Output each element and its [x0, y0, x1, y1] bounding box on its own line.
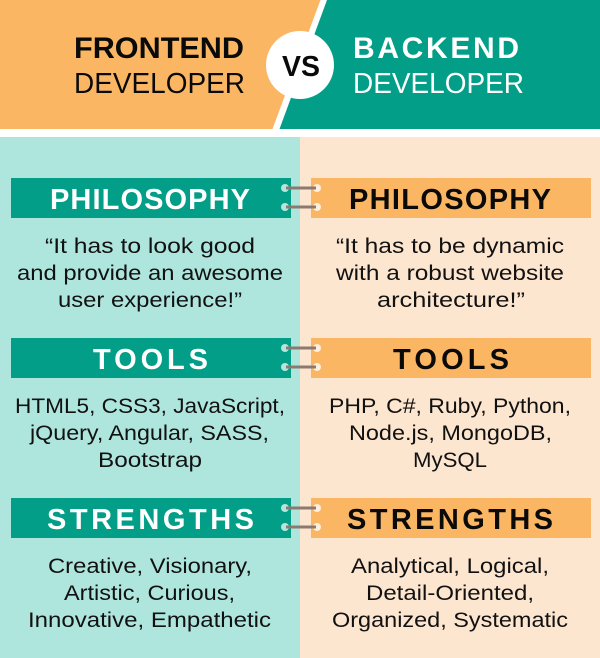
vs badge: VS — [282, 51, 320, 83]
banner: backend philosophy — [311, 178, 591, 218]
panel: frontend column — [0, 137, 300, 658]
banner: frontend tools — [11, 338, 291, 378]
banner: backend strengths: STRENGTHS — [347, 504, 553, 536]
text: frontend philosophy quote: user experience!” — [58, 289, 242, 312]
icon: binder rings strengths — [281, 504, 321, 531]
section: philosophy — [11, 178, 591, 312]
text: backend strengths list: Analytical, Logical, — [351, 555, 549, 578]
banner: backend tools — [311, 338, 591, 378]
text: frontend strengths list: Innovative, Empathetic — [28, 609, 271, 632]
text: frontend tools list — [15, 395, 285, 472]
text: frontend strengths list — [28, 555, 271, 632]
banner: backend strengths — [311, 498, 591, 538]
section: tools — [11, 338, 591, 472]
vs badge — [266, 31, 334, 99]
text: backend tools list — [329, 395, 571, 472]
banner: backend philosophy: PHILOSOPHY — [349, 184, 551, 216]
heading: backend developer — [353, 32, 524, 100]
banner: frontend strengths — [11, 498, 291, 538]
icon: binder rings tools — [281, 344, 321, 371]
heading: frontend developer: DEVELOPER — [74, 68, 245, 100]
heading: frontend developer — [74, 32, 245, 100]
banner: frontend strengths: STRENGTHS — [47, 504, 254, 536]
text: backend tools list: PHP, C#, Ruby, Python, — [329, 395, 571, 418]
heading: backend developer: DEVELOPER — [353, 68, 524, 100]
text: frontend tools list: jQuery, Angular, SASS, — [29, 422, 269, 445]
text: backend tools list: MySQL — [413, 449, 487, 472]
header: backend side — [280, 0, 600, 129]
text: backend philosophy quote: “It has to be dynamic — [336, 235, 564, 258]
text: backend strengths list — [332, 555, 568, 632]
text: backend philosophy quote — [335, 235, 564, 312]
text: frontend philosophy quote — [17, 235, 283, 312]
text: frontend philosophy quote: “It has to look good — [45, 235, 255, 258]
text: frontend strengths list: Creative, Visionary, — [48, 555, 252, 578]
icon: binder rings philosophy — [281, 184, 321, 211]
text: backend strengths list: Organized, Systematic — [332, 609, 568, 632]
text: backend strengths list: Detail-Oriented, — [366, 582, 534, 605]
text: frontend philosophy quote: and provide an awesome — [17, 262, 283, 285]
text: frontend strengths list: Artistic, Curious, — [64, 582, 235, 605]
heading: backend developer: BACKEND — [353, 32, 519, 65]
text: frontend tools list: HTML5, CSS3, JavaScript, — [15, 395, 285, 418]
text: backend philosophy quote: architecture!” — [377, 289, 525, 312]
text: frontend tools list: Bootstrap — [98, 449, 202, 472]
banner: backend tools: TOOLS — [393, 344, 509, 376]
text: backend tools list: Node.js, MongoDB, — [349, 422, 552, 445]
panel: backend column — [300, 137, 600, 658]
banner: frontend philosophy — [11, 178, 291, 218]
banner: frontend tools: TOOLS — [93, 344, 208, 376]
text: backend philosophy quote: with a robust website — [335, 262, 564, 285]
banner: frontend philosophy: PHILOSOPHY — [50, 184, 250, 216]
header: frontend side — [0, 0, 320, 129]
heading: frontend developer: FRONTEND — [74, 32, 244, 65]
section: strengths — [11, 498, 591, 632]
